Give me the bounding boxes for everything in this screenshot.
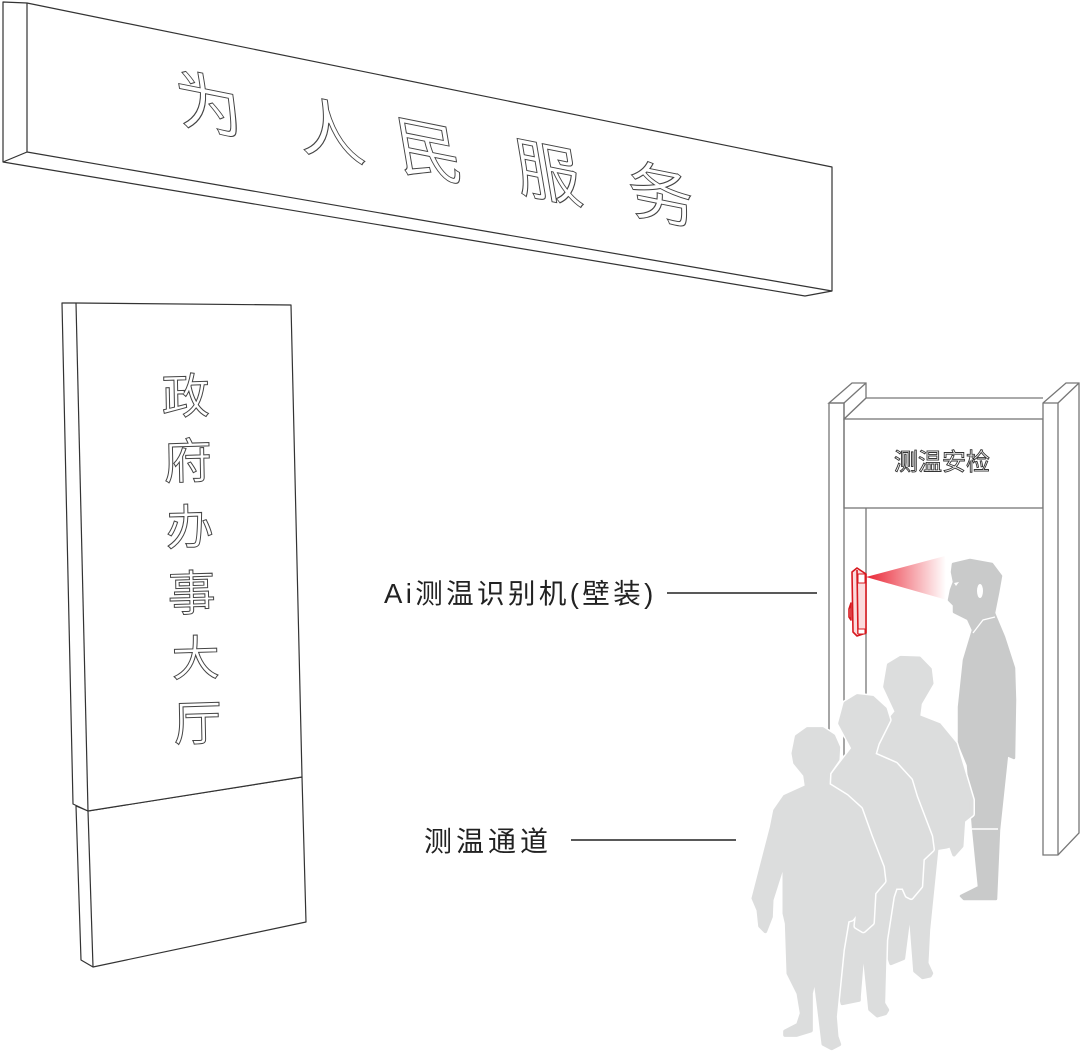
temperature check gate — [829, 383, 1079, 855]
banner text: 为人民服务: 务 — [622, 153, 700, 240]
queue of people silhouettes — [753, 658, 972, 1048]
banner text: 为人民服务: 民 — [390, 109, 468, 196]
sign text: 政府办事大厅: 府 — [163, 436, 212, 490]
sign text: 政府办事大厅 — [161, 371, 222, 752]
banner text: 为人民服务: 人 — [291, 89, 369, 176]
callout: AI scanner: Ai测温识别机(壁装) — [384, 578, 657, 609]
scan beam — [866, 556, 947, 600]
collar, eye and ear highlights — [973, 617, 995, 633]
banner text: 为人民服务 — [170, 63, 700, 240]
gate right post — [1043, 383, 1079, 855]
sign text: 政府办事大厅: 大 — [171, 633, 220, 687]
callout: temperature channel: 测温通道 — [424, 826, 552, 857]
sign text: 政府办事大厅: 事 — [167, 568, 216, 622]
overhead banner sign — [3, 2, 832, 296]
banner text: 为人民服务: 为 — [170, 63, 248, 150]
gate header panel — [844, 419, 1043, 508]
sign text: 政府办事大厅: 政 — [161, 371, 210, 425]
icon: wall-mounted AI temperature scanner — [849, 568, 866, 636]
gate text: 测温安检 — [894, 449, 990, 476]
vertical sign: government service hall — [62, 303, 306, 967]
person 1 — [753, 729, 883, 1048]
banner text: 为人民服务: 服 — [509, 131, 587, 218]
person 2 — [832, 696, 932, 1016]
sign text: 政府办事大厅: 办 — [165, 502, 214, 556]
standing person silhouette — [949, 560, 1015, 899]
gate left post — [829, 383, 866, 792]
person 3 — [873, 658, 972, 977]
sign text: 政府办事大厅: 厅 — [173, 698, 222, 752]
